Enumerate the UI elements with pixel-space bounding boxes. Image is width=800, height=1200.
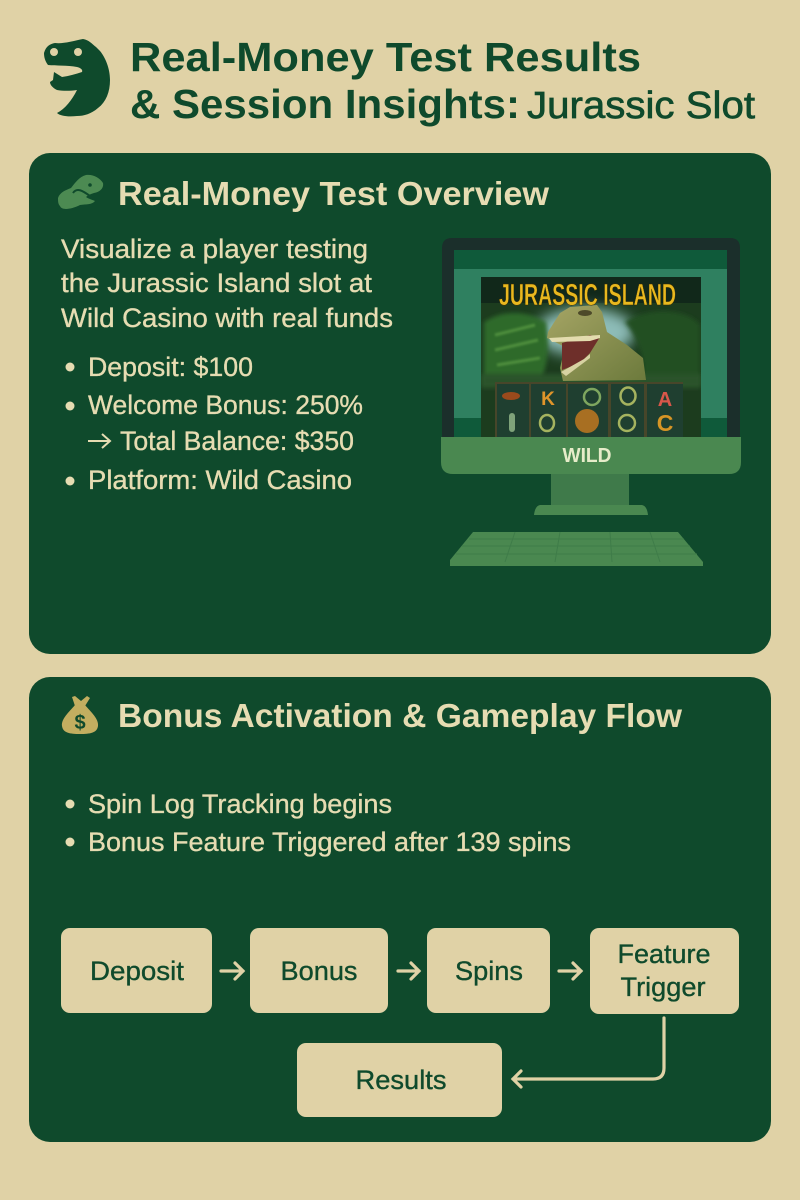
flow step: deposit bbox=[61, 928, 212, 1013]
title: Jurassic Slot bbox=[527, 85, 755, 127]
heading: bonus activation: Bonus Activation & Gameplay Flow bbox=[118, 698, 683, 735]
panel: bonus activation and gameplay flow bbox=[29, 677, 771, 1142]
text block: intro: the Jurassic Island slot at bbox=[61, 268, 372, 298]
text block: intro: Visualize a player testing bbox=[61, 234, 368, 264]
t-rex bbox=[547, 305, 646, 381]
icon: green dinosaur bbox=[58, 175, 103, 209]
keyboard bbox=[450, 532, 703, 566]
arrow: deposit to bonus bbox=[221, 963, 243, 979]
list: test facts: Deposit: $100 bbox=[88, 352, 253, 382]
flow step: bonus: Bonus bbox=[280, 956, 358, 986]
arrow: spins to feature trigger bbox=[559, 963, 581, 979]
game logo: JURASSIC ISLAND bbox=[499, 277, 676, 312]
arrow: bonus to spins bbox=[398, 963, 419, 979]
flow step: spins: Spins bbox=[455, 956, 523, 986]
icon: t-rex head logo bbox=[44, 39, 110, 116]
text block: intro bbox=[61, 234, 393, 333]
icon: money bag bbox=[62, 696, 98, 734]
list: spin log: Bonus Feature Triggered after 139 spins bbox=[88, 827, 571, 857]
list: test facts bbox=[66, 352, 363, 495]
list: test facts: Total Balance: $350 bbox=[120, 426, 354, 456]
arrow: feature trigger to results bbox=[513, 1018, 664, 1087]
list: spin log bbox=[66, 789, 571, 857]
flow step: results: Results bbox=[356, 1065, 446, 1095]
icon: money bag: $ bbox=[74, 712, 86, 734]
monitor bezel bbox=[442, 238, 740, 437]
monitor base with wild label: WILD bbox=[562, 445, 612, 467]
flow step: feature trigger bbox=[590, 928, 739, 1014]
panel: real-money test overview bbox=[29, 153, 771, 654]
text block: intro: Wild Casino with real funds bbox=[61, 303, 393, 333]
slot reels: A bbox=[658, 389, 672, 411]
flow step: deposit: Deposit bbox=[90, 956, 185, 986]
monitor stand bbox=[534, 474, 648, 515]
flow step: feature trigger: Trigger bbox=[620, 972, 706, 1002]
slot game artwork bbox=[481, 277, 701, 437]
monitor base with wild label bbox=[441, 437, 741, 474]
heading: real-money test overview: Real-Money Test Overview bbox=[118, 176, 550, 213]
title bbox=[130, 34, 755, 127]
list: test facts: Welcome Bonus: 250% bbox=[88, 390, 363, 420]
slot reels bbox=[495, 382, 683, 437]
title: Real-Money Test Results bbox=[130, 34, 641, 80]
flow step: feature trigger: Feature bbox=[618, 939, 710, 969]
illustration: desktop computer with slot game bbox=[441, 238, 741, 566]
slot reels: C bbox=[657, 410, 673, 436]
slot reels: K bbox=[541, 389, 555, 410]
flow step: spins bbox=[427, 928, 550, 1013]
flow step: bonus bbox=[250, 928, 388, 1013]
flow step: results bbox=[297, 1043, 502, 1117]
list: test facts: Platform: Wild Casino bbox=[88, 465, 352, 495]
title: & Session Insights: bbox=[130, 81, 520, 127]
list: spin log: Spin Log Tracking begins bbox=[88, 789, 392, 819]
monitor screen bbox=[454, 250, 727, 437]
